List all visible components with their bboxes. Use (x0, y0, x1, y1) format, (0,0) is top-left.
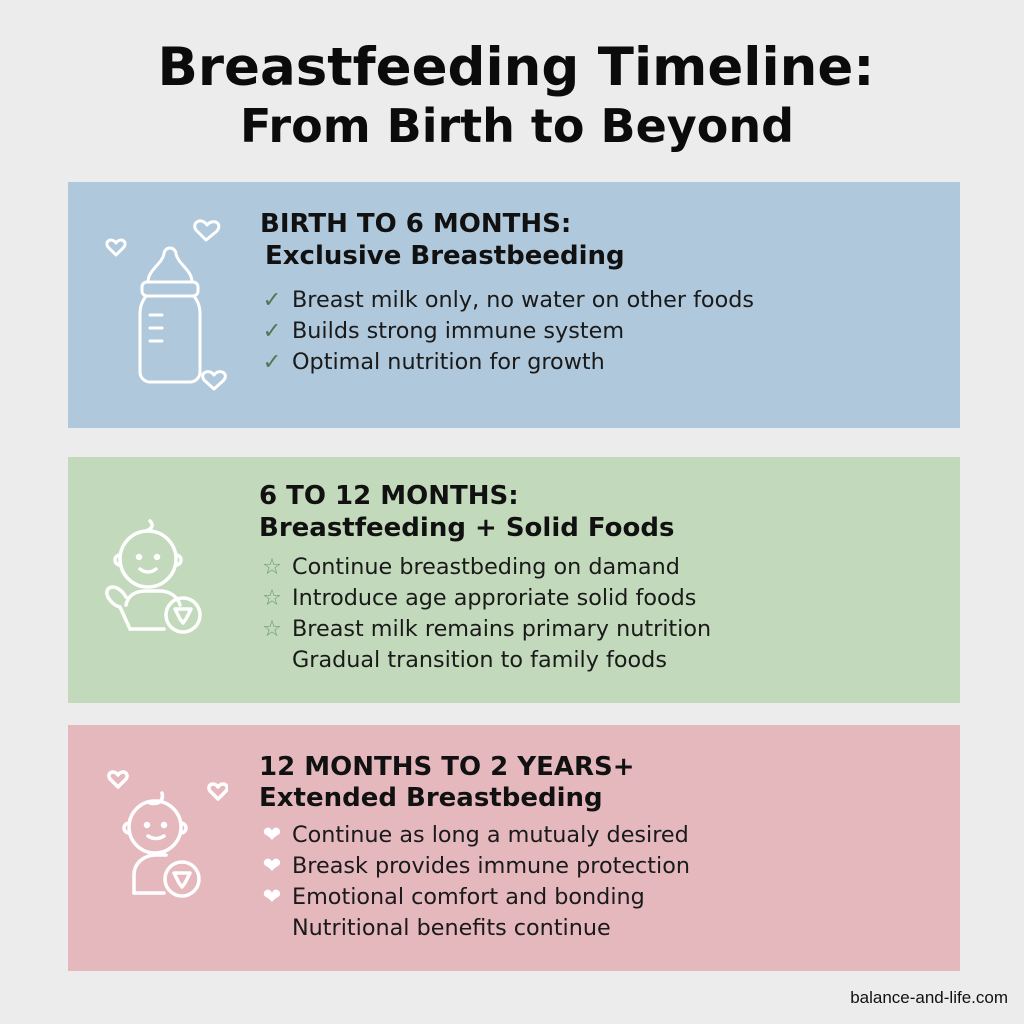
panel: birth to 6 months (68, 182, 960, 428)
title: From Birth to Beyond (240, 99, 794, 153)
title: Breastfeeding Timeline: (157, 37, 874, 98)
panel: 12 months to 2 years: Nutritional benefits continue (292, 915, 611, 941)
panel: 6 to 12 months (68, 457, 960, 703)
panel: 6 to 12 months: Introduce age approriate solid foods (292, 585, 696, 611)
panel: birth to 6 months: Optimal nutrition for growth (292, 349, 605, 375)
icon: baby bottle with hearts (105, 219, 227, 391)
bullet list: Continue as long a mutualy desired (292, 822, 689, 848)
panel: birth to 6 months: ✓ (263, 287, 281, 313)
panel: 12 months to 2 years: ❤ (263, 884, 281, 910)
panel: birth to 6 months: ✓ (263, 349, 281, 375)
panel: 6 to 12 months: ☆ (262, 585, 282, 611)
panel: 6 to 12 months: ☆ (262, 616, 282, 642)
panel: 12 months to 2 years: ❤ (263, 822, 281, 848)
panel: birth to 6 months: Builds strong immune system (292, 318, 624, 344)
panel: birth to 6 months: ✓ (263, 318, 281, 344)
panel: 6 to 12 months: Breast milk remains primary nutrition (292, 616, 711, 642)
panel: birth to 6 months: Exclusive Breastbeeding (265, 241, 625, 271)
icon: baby with hearts (107, 770, 228, 898)
footer credit: balance-and-life.com (850, 988, 1008, 1007)
panel: 12 months to 2 years: Emotional comfort and bonding (292, 884, 645, 910)
heading: 6 TO 12 MONTHS: (259, 481, 519, 511)
panel: 6 to 12 months: ☆ (262, 554, 282, 580)
panel: 12 months to 2 years: ❤ (263, 853, 281, 879)
title (157, 37, 874, 153)
panel: 12 months to 2 years (68, 725, 960, 971)
panel: 12 months to 2 years: Breask provides immune protection (292, 853, 690, 879)
panel: 6 to 12 months: Breastfeeding + Solid Foods (259, 513, 674, 543)
icon: baby with spoon (105, 519, 202, 634)
heading: BIRTH TO 6 MONTHS: (260, 209, 571, 239)
panel: 6 to 12 months: Gradual transition to family foods (292, 647, 667, 673)
bullet list: Breast milk only, no water on other foods (292, 287, 754, 313)
panel: 12 months to 2 years: Extended Breastbeding (259, 783, 603, 813)
bullet list: Continue breastbeding on damand (292, 554, 680, 580)
heading: 12 MONTHS TO 2 YEARS+ (259, 752, 635, 782)
